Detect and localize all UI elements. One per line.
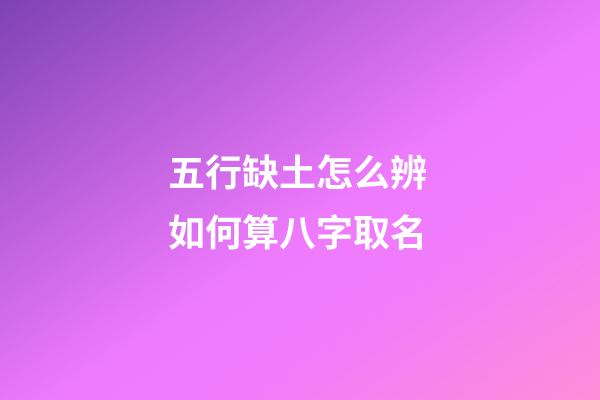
title: 五行缺土怎么辨: [168, 153, 427, 194]
title: 如何算八字取名: [168, 213, 427, 254]
title: [168, 153, 427, 254]
